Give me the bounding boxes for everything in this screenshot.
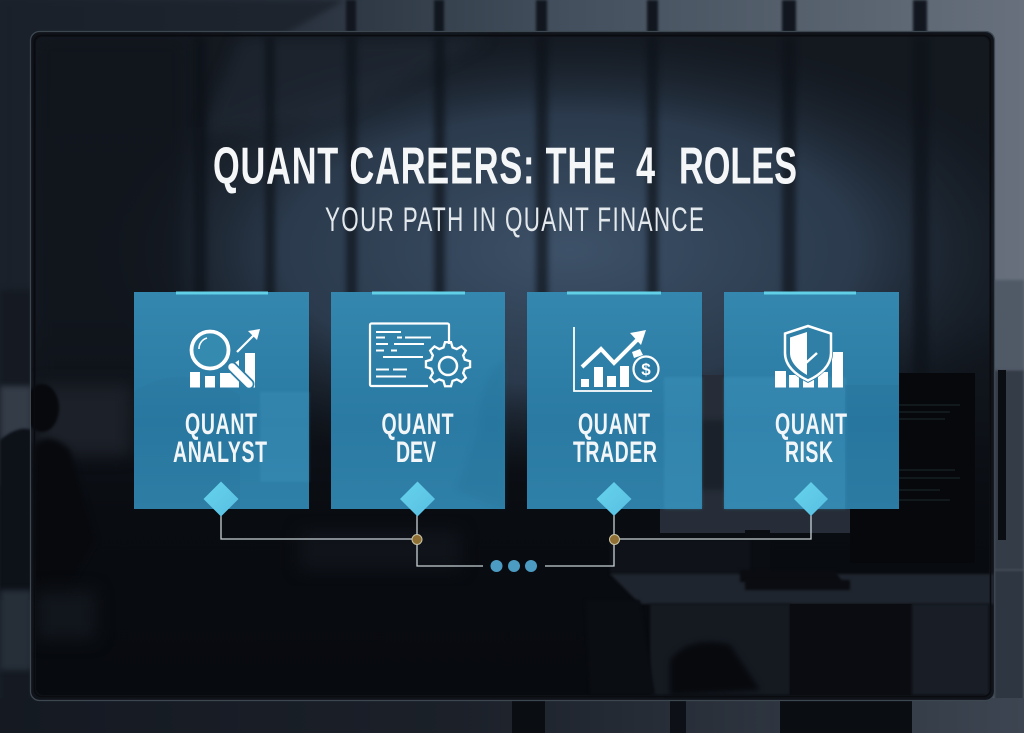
diamond — [204, 482, 238, 516]
icon: magnifier over bars — [188, 328, 260, 388]
label: QUANT — [185, 408, 257, 441]
pagination dots — [490, 560, 537, 572]
diamond — [596, 482, 632, 516]
icon: shield over bars — [775, 324, 843, 388]
label: QUANT — [381, 408, 454, 441]
panel: Quant Trader — [527, 292, 702, 516]
label: RISK — [785, 436, 834, 469]
panel: Quant Analyst — [134, 292, 309, 516]
icon: rising chart with dollar coin: $ — [641, 360, 651, 379]
label: QUANT — [578, 408, 650, 441]
diamond — [794, 482, 828, 516]
diamond — [400, 482, 435, 516]
subtitle: YOUR PATH IN QUANT FINANCE — [325, 201, 704, 239]
title: ROLES — [679, 137, 797, 195]
icon: rising chart with dollar coin — [574, 327, 658, 391]
label: DEV — [396, 436, 436, 469]
label: TRADER — [573, 436, 657, 469]
junction dots — [412, 534, 620, 544]
title: QUANT CAREERS: THE — [213, 137, 616, 195]
label: QUANT — [775, 408, 847, 441]
connector lines — [221, 515, 811, 566]
panel: Quant Risk — [724, 292, 899, 516]
title: 4 — [636, 137, 655, 195]
icon: code window and gear — [370, 324, 470, 386]
panel: Quant Dev — [331, 292, 505, 516]
label: ANALYST — [173, 436, 267, 469]
